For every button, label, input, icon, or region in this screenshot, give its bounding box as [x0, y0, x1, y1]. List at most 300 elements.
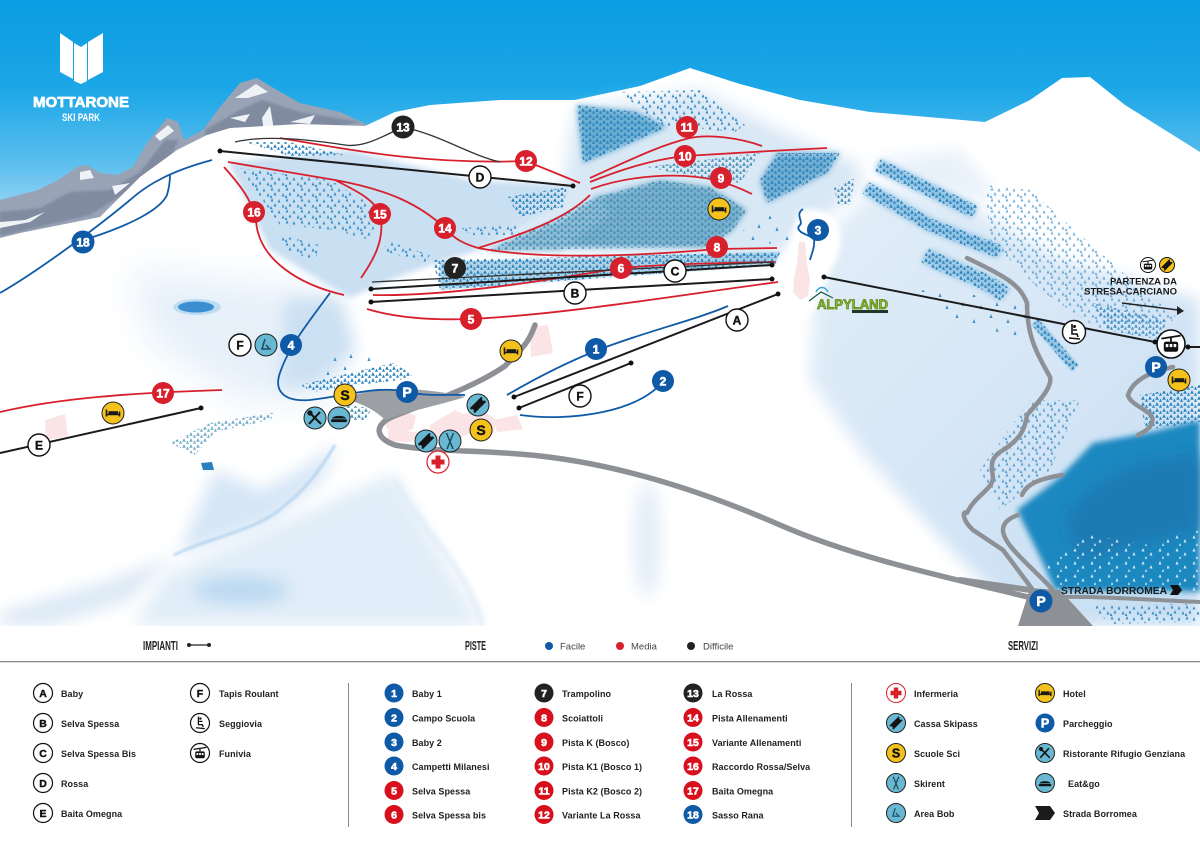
legend: ristorante: Ristorante Rifugio Genziana [1063, 749, 1186, 759]
heading: servizi: SERVIZI [1008, 638, 1038, 653]
pink buildings [45, 242, 810, 442]
icon: skipass south [415, 430, 437, 452]
icon: area bob [255, 334, 277, 356]
legend: 8 [534, 708, 603, 727]
legend: skirent [886, 774, 945, 792]
legend: area bob: Area Bob [914, 809, 955, 819]
divider 1 [348, 683, 349, 827]
legend: 13: 13 [687, 688, 699, 700]
forest: left slope top belt [245, 142, 345, 156]
rock mass [0, 78, 368, 245]
marker 7: 7 [452, 262, 459, 276]
lifts [0, 148, 1200, 453]
forest: parking belt [300, 363, 413, 392]
forest: central tint west [485, 195, 610, 250]
piste 4 [278, 293, 465, 400]
shade: right slope [810, 185, 1200, 626]
map markers [28, 116, 1190, 612]
icon: ristorante [304, 407, 326, 429]
forest: band by lifts [433, 252, 780, 290]
forest: right band 3 [925, 255, 1005, 295]
forest: scatter below lift [920, 290, 1030, 340]
marker 18 [72, 230, 94, 254]
building: cluster east [460, 409, 496, 433]
legend: scuole sci [886, 744, 960, 762]
legend: 14: Pista Allenamenti [712, 714, 788, 724]
legend: skirent: Skirent [914, 779, 945, 789]
Alpyland logo: ALPYLAND [817, 297, 888, 312]
forest: east band [1093, 303, 1167, 340]
legend: 2: 2 [391, 712, 397, 724]
piste 18 [0, 160, 212, 293]
shade: left bottom [0, 555, 175, 626]
marker 14: 14 [438, 222, 452, 236]
legend: B: B [39, 718, 47, 730]
piste 14 [228, 162, 478, 248]
marker 16: 16 [247, 206, 261, 220]
marker A: A [733, 314, 742, 328]
marker 3: 3 [815, 224, 822, 238]
difficulty: facile [545, 642, 585, 652]
legend: 12: 12 [538, 810, 550, 822]
piste 1 [507, 306, 728, 395]
shade: east gully [633, 482, 661, 598]
marker 2: 2 [660, 374, 667, 388]
icon: parking south [1030, 590, 1052, 612]
icon: parking central [396, 381, 418, 403]
forest: strip by road [1035, 322, 1075, 368]
piste 6 [373, 262, 775, 295]
legend: C [34, 744, 136, 762]
road: main valley [379, 325, 1040, 600]
piste 17 [0, 390, 222, 412]
streak: valley [395, 480, 482, 626]
marker 9 [710, 167, 732, 189]
legend: scuole sci: Scuole Sci [914, 749, 960, 759]
snow bowl [785, 209, 841, 320]
legend: 16: Raccordo Rossa/Selva [712, 762, 811, 772]
icon: infermeria [427, 451, 449, 473]
legend: 11: Pista K2 (Bosco 2) [562, 786, 642, 796]
forest: right band 1 [878, 165, 975, 212]
marker C [664, 260, 686, 282]
snow: west of strip [980, 588, 1028, 624]
legend: 1: 1 [391, 688, 397, 700]
legend: 13: La Rossa [712, 689, 753, 699]
legend: 3: Baby 2 [412, 738, 442, 748]
legend: 5 [384, 781, 471, 800]
road: to hut [1128, 367, 1173, 435]
icon: small ticket [1160, 258, 1174, 272]
legend: 3 [384, 732, 442, 752]
marker 1 [585, 338, 607, 360]
legend: A: Baby [61, 689, 83, 699]
road: wide plaza [345, 389, 465, 420]
legend: cassa skipass [886, 714, 978, 732]
legend: F: Tapis Roulant [219, 689, 279, 699]
shade: top saddle [886, 149, 993, 200]
legend: ristorante [1036, 744, 1186, 762]
sky background [0, 0, 1200, 200]
lift funivia east [1188, 346, 1200, 348]
shade: left forest slope [228, 150, 590, 298]
forest: left slope [240, 168, 380, 240]
marker C: C [671, 264, 680, 278]
legend rule [0, 661, 1200, 662]
icon: scuola west: S [340, 387, 350, 403]
forest: central tint [560, 180, 747, 247]
legend: 6: Selva Spessa bis [412, 810, 486, 820]
legend: area bob [886, 804, 955, 822]
legend: 15: Variante Allenamenti [712, 738, 801, 748]
marker 7 [444, 257, 466, 279]
legend: scuole sci: S [892, 746, 900, 760]
marker 17 [152, 382, 174, 404]
legend: 11 [534, 781, 642, 800]
forest: ridge top [735, 208, 790, 248]
piste 7 black [372, 262, 772, 282]
building: left [45, 414, 68, 440]
marker 5: 5 [468, 312, 475, 326]
shade: basin under lifts [280, 298, 355, 390]
legend: 2: Campo Scuola [412, 714, 476, 724]
marker 13: 13 [396, 120, 410, 134]
legend: 4: Campetti Milanesi [412, 762, 490, 772]
building: upper [530, 325, 553, 357]
legend: D: Rossa [61, 779, 89, 789]
legend: 6: 6 [391, 810, 397, 822]
icon: hotel baita [102, 402, 124, 424]
legend: 5: Selva Spessa [412, 786, 471, 796]
forest: top block tint [577, 105, 667, 163]
icon: scuola east: S [476, 422, 486, 438]
partenza label [1110, 258, 1177, 288]
marker 15 [369, 203, 391, 225]
road: third stub [1022, 475, 1062, 495]
marker 8: 8 [714, 240, 721, 254]
red pistes [0, 136, 827, 412]
marker 6 [610, 257, 632, 279]
road: mountain switchback [964, 258, 1050, 590]
snow: below left road [700, 395, 960, 626]
marker 12 [515, 150, 537, 172]
forest: dark core [1065, 455, 1200, 560]
legend: 17 [684, 781, 774, 800]
forest: right lower scatter [980, 400, 1080, 510]
piste 8 [478, 248, 777, 256]
logo mark [60, 33, 103, 84]
parking apron [1018, 588, 1093, 626]
forest: slope east [385, 240, 430, 262]
marker 14 [434, 217, 456, 239]
marker 18: 18 [76, 236, 90, 250]
difficulty: facile: Facile [560, 642, 585, 652]
heading: piste: PISTE [465, 638, 486, 653]
marker 9: 9 [718, 172, 725, 186]
forest: below strada [1090, 604, 1200, 624]
forest: right block tint [760, 153, 840, 203]
piste 15 [335, 180, 381, 278]
forest: central texture [490, 180, 747, 250]
icon: small funivia [1140, 258, 1156, 272]
roads [345, 258, 1200, 626]
lift F [519, 363, 631, 408]
lift E [0, 408, 201, 453]
legend: eat and go [1036, 774, 1100, 792]
marker 2 [652, 370, 674, 392]
legend: 12: Variante La Rossa [562, 810, 641, 820]
legend: 4: 4 [391, 761, 397, 773]
piste 13 black [235, 127, 500, 162]
legend: eat and go: Eat&go [1068, 779, 1100, 789]
marker F west [229, 334, 251, 356]
marker F centre: F [576, 390, 584, 404]
legend: E: E [39, 808, 47, 820]
road: second switchback [1003, 515, 1053, 590]
piste 3 [798, 209, 814, 260]
legend: 3: 3 [391, 737, 397, 749]
legend: strada borromea: Strada Borromea [1063, 809, 1138, 819]
marker 5 [460, 308, 482, 330]
shade: crater flank [178, 442, 338, 555]
building: low [388, 430, 418, 442]
marker D: D [476, 170, 485, 184]
marker B: B [571, 286, 580, 300]
marker F west: F [236, 338, 244, 352]
forest: upper scatter [620, 90, 745, 132]
piste 14 link [478, 195, 590, 248]
legend background [0, 626, 1200, 848]
Alpyland logo [809, 288, 888, 313]
legend: cassa skipass: Cassa Skipass [914, 719, 978, 729]
icon: seggiovia [1062, 320, 1086, 344]
building: tower [793, 242, 810, 300]
text: stresa carciano: STRESA-CARCIANO [1084, 286, 1177, 298]
legend: 14 [684, 708, 788, 727]
snow terrain base [0, 68, 1200, 300]
legend: 9: Pista K (Bosco) [562, 738, 629, 748]
legend: 18: 18 [687, 810, 699, 822]
legend: 6 [384, 805, 486, 824]
piste 16 [224, 167, 344, 295]
lift terminals [198, 148, 1190, 410]
marker 16 [243, 201, 265, 223]
marker D [469, 166, 491, 188]
marker F centre [569, 385, 591, 407]
legend: 10 [534, 756, 642, 776]
legend: strada borromea [1035, 806, 1138, 820]
piste 9 [591, 176, 752, 194]
blue pistes [0, 160, 814, 417]
forest: small cluster [345, 405, 372, 420]
lift A [514, 294, 778, 397]
legend: parcheggio: Parcheggio [1063, 719, 1113, 729]
lift seggiovia [824, 277, 1155, 342]
legend: E [34, 804, 123, 822]
marker 1: 1 [593, 342, 600, 356]
piste 5 [367, 282, 778, 319]
lift C [371, 265, 772, 289]
legend: 8: Scoiattoli [562, 714, 603, 724]
icon: hotel central [708, 198, 730, 220]
legend: 8: 8 [541, 712, 547, 724]
legend: E: Baita Omegna [61, 809, 123, 819]
heading: impianti: IMPIANTI [143, 638, 178, 653]
shade: basin core [193, 576, 289, 604]
logo sub: SKI PARK [62, 112, 100, 124]
legend: parcheggio: P [1041, 716, 1049, 730]
icon: skipass east [467, 394, 489, 416]
difficulty: media: Media [631, 642, 658, 652]
forest: dark knot [201, 462, 214, 470]
marker 10 [674, 145, 696, 167]
road: strada east [1060, 597, 1200, 602]
legend: hotel [1036, 684, 1086, 702]
marker 12: 12 [519, 154, 533, 168]
marker B [564, 282, 586, 304]
legend: 15: 15 [687, 737, 699, 749]
legend: 15 [684, 732, 801, 752]
icon: parking east [1145, 356, 1167, 378]
forest: right block texture [760, 153, 840, 203]
legend: infermeria: Infermeria [914, 689, 959, 699]
icon: scuola west [334, 384, 356, 406]
legend: A [34, 684, 83, 702]
forest: hut cluster [1140, 385, 1200, 430]
legend: funivia: Funivia [219, 749, 252, 759]
building: cluster centre [430, 410, 473, 439]
legend: hotel: Hotel [1063, 689, 1086, 699]
marker 3 [807, 219, 829, 241]
legend: 10: Pista K1 (Bosco 1) [562, 762, 642, 772]
shade: lower basin [134, 473, 482, 626]
legend: F [190, 684, 279, 702]
marker A [726, 309, 748, 331]
legend: 18 [684, 805, 765, 824]
marker 6: 6 [618, 262, 625, 276]
slope shading [0, 90, 1200, 626]
road: west stub [960, 580, 1030, 590]
icon: parking east: P [1151, 359, 1161, 375]
marker 4: 4 [288, 338, 295, 352]
rocky ridge [0, 78, 368, 245]
marker E [28, 434, 50, 456]
icon: funivia [1157, 330, 1185, 358]
legend: 17: 17 [687, 786, 699, 798]
forests [170, 90, 1200, 624]
legend: F: F [197, 688, 204, 700]
icon: parking central: P [402, 384, 412, 400]
legend: infermeria [886, 684, 959, 702]
legend: 11: 11 [538, 786, 550, 798]
lift D [220, 151, 573, 186]
difficulty: media [616, 642, 658, 652]
marker 15: 15 [373, 208, 387, 222]
forest: crater scatter [170, 412, 277, 455]
strada borromea label: STRADA BORROMEA [1061, 586, 1167, 597]
legend panel [0, 626, 1200, 848]
legend: 17: Baita Omegna [712, 786, 774, 796]
legend: 7: 7 [541, 688, 547, 700]
forest: right scatter [985, 185, 1180, 330]
legend: seggiovia: Seggiovia [219, 719, 263, 729]
marker 8 [706, 236, 728, 258]
divider 2 [851, 683, 852, 827]
marker 13 [392, 116, 414, 138]
forest: dense lower right [1017, 420, 1200, 592]
difficulty: difficile: Difficile [703, 642, 733, 652]
legend: 5: 5 [391, 786, 397, 798]
arrow: partenza [1122, 303, 1184, 315]
icon: scuola east [470, 419, 492, 441]
marker 11: 11 [681, 120, 694, 134]
marker E: E [35, 438, 43, 452]
legend: 14: 14 [687, 712, 699, 724]
legend: 7: Trampolino [562, 689, 612, 699]
piste 11 [590, 136, 762, 178]
forest: slope lower [280, 235, 320, 260]
marker 17: 17 [156, 386, 170, 400]
legend: 13 [684, 684, 753, 702]
forest: top block texture [577, 105, 667, 163]
legend: D [34, 774, 89, 792]
icon: hotel east [1168, 369, 1190, 391]
streak: crater ridge [174, 445, 335, 555]
legend: 12 [534, 805, 641, 824]
text: partenza: PARTENZA DA [1110, 276, 1177, 288]
legend: 7 [534, 684, 612, 702]
piste 12 [280, 138, 580, 183]
legend: 1: Baby 1 [412, 689, 442, 699]
legend: parcheggio [1036, 714, 1113, 732]
legend: A: A [39, 688, 47, 700]
marker 4 [280, 334, 302, 356]
legend: 9: 9 [541, 737, 547, 749]
forest: teal cluster [834, 178, 855, 205]
logo wordmark: MOTTARONE [33, 94, 129, 111]
lake [173, 299, 221, 315]
rock snow highlights [0, 84, 315, 228]
shade: lake plateau [130, 270, 340, 400]
legend: funivia [190, 744, 252, 762]
legend: 16 [684, 756, 811, 776]
piste 2 [520, 381, 663, 417]
forest: right band 2 [866, 188, 1000, 252]
lift sample [187, 643, 211, 647]
forest: band by lifts tint [440, 252, 780, 290]
legend: 1 [384, 684, 442, 702]
shade: central peak [480, 90, 860, 260]
forest: snow specks [1045, 525, 1200, 592]
icon: parking south: P [1036, 593, 1046, 609]
lift B [371, 279, 772, 302]
legend: C: Selva Spessa Bis [61, 749, 136, 759]
icon: hotel upper [500, 340, 522, 362]
forest: basin scatter [320, 350, 372, 378]
forest: between pistes [647, 153, 760, 183]
icon: eat and go [328, 407, 350, 429]
marker 10: 10 [678, 150, 692, 164]
building: cluster west [386, 410, 416, 434]
building: square [493, 415, 523, 432]
legend: 18: Sasso Rana [712, 810, 765, 820]
logo: Mottarone Ski Park [33, 33, 129, 124]
legend: C: C [39, 748, 47, 760]
rock shadows [0, 100, 360, 236]
legend: 10: 10 [538, 761, 550, 773]
legend: D: D [39, 778, 47, 790]
legend: 4 [384, 756, 490, 776]
